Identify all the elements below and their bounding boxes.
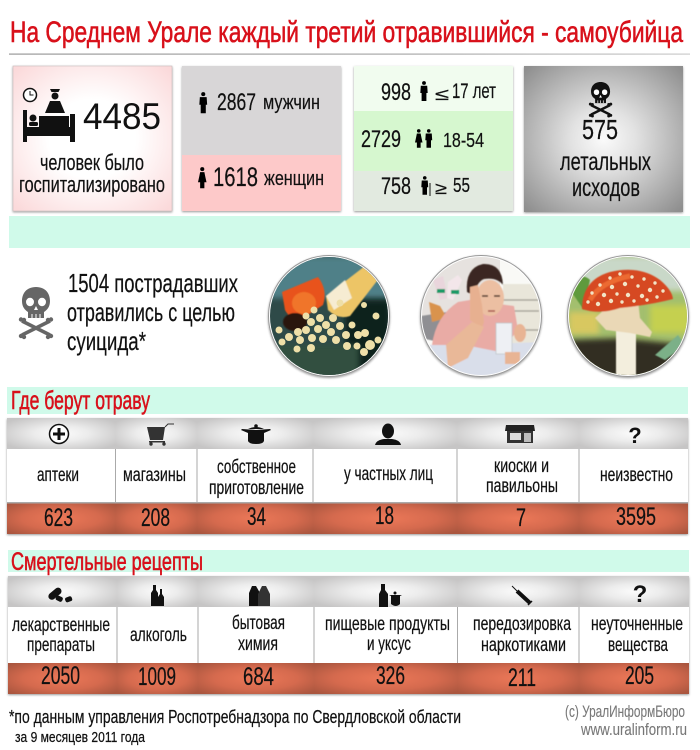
- number row: 208: [141, 504, 170, 532]
- labels row: передозировка: [473, 614, 571, 635]
- labels row: химия: [238, 634, 278, 655]
- caption: hospitalized: госпитализировано: [19, 172, 165, 197]
- men count: 2867: [217, 89, 256, 116]
- age under 17: ≤: [435, 85, 449, 104]
- age 18-54: 2729: [361, 126, 401, 153]
- age under 17: [381, 79, 496, 106]
- icon row: [7, 418, 688, 449]
- age over 55: 758: [381, 173, 411, 200]
- number row: 211: [508, 664, 536, 692]
- labels row: и уксус: [367, 634, 411, 655]
- caption: deaths: летальных: [560, 148, 651, 176]
- number row: 205: [625, 662, 654, 690]
- women count: [198, 162, 324, 192]
- icon row: [8, 576, 689, 608]
- icon: shopping cart: [147, 424, 174, 446]
- icon: gray skull: [19, 287, 53, 339]
- age over 55: ≥: [435, 179, 447, 198]
- icon: pills: [47, 586, 73, 603]
- table: substances: [8, 576, 689, 694]
- panel: deaths: [524, 66, 683, 212]
- labels row: наркотиками: [481, 635, 566, 656]
- labels row: алкоголь: [130, 625, 187, 646]
- text: 1504 suicide attempts: суицида*: [67, 326, 146, 356]
- labels row: неизвестно: [600, 465, 673, 486]
- icon: syringe: [512, 586, 532, 605]
- number row: 684: [243, 663, 274, 691]
- labels row: бытовая: [232, 613, 285, 634]
- labels row: собственное: [217, 457, 296, 478]
- number row: 2050: [41, 662, 80, 690]
- labels row: лекарственные: [12, 615, 110, 636]
- labels row: магазины: [123, 465, 186, 486]
- age under 17: 998: [381, 79, 411, 106]
- icon: bottle and pot: [379, 584, 402, 607]
- table: sources: [7, 418, 688, 534]
- labels row: препараты: [27, 635, 95, 656]
- caption: hospitalized: человек было: [40, 150, 144, 175]
- icon: cooking pot: [241, 424, 271, 444]
- number row: [7, 502, 688, 534]
- labels row: [12, 613, 683, 656]
- text: 1504 suicide attempts: [67, 268, 238, 356]
- panel: gender split: [182, 66, 341, 211]
- icon: question mark: ?: [633, 581, 647, 608]
- age over 55: [381, 173, 470, 200]
- panel: age split: [354, 66, 513, 211]
- caption: deaths: [560, 148, 651, 202]
- age 18-54: 18-54: [443, 130, 484, 152]
- number row: 34: [247, 503, 266, 531]
- age under 17: 17 лет: [452, 80, 496, 103]
- number row: 7: [516, 504, 526, 532]
- labels row: павильоны: [486, 476, 558, 497]
- labels row: аптеки: [37, 465, 79, 486]
- section heading: where poison is obtained: [7, 385, 688, 415]
- icon: hospital bed with nurse: [23, 88, 75, 142]
- footnote: *по данным управления Роспотребнадзора по Свердловской области: [9, 707, 461, 727]
- photo: woman with headache: [420, 256, 542, 380]
- icon: pharmacy cross: [50, 424, 68, 444]
- age over 55: 55: [453, 175, 470, 197]
- icon: household chemical bottles: [249, 586, 270, 606]
- labels row: [37, 456, 673, 499]
- icon: person bust: [375, 424, 401, 445]
- number row: 326: [376, 662, 405, 690]
- number row: 3595: [616, 503, 656, 531]
- caption: hospitalized: [19, 150, 165, 197]
- footnote: [9, 707, 461, 746]
- labels row: киоски и: [494, 456, 549, 477]
- photo: fly agaric mushroom: [568, 256, 690, 380]
- labels row: вещества: [608, 635, 668, 656]
- icon: question mark: ?: [628, 423, 642, 448]
- women count: 1618: [213, 162, 258, 192]
- section heading: deadly recipes: [8, 548, 689, 576]
- panel: hospitalized: [13, 66, 172, 211]
- labels row: приготовление: [209, 478, 304, 499]
- men count: мужчин: [263, 92, 320, 114]
- footnote: за 9 месяцев 2011 года: [15, 730, 146, 746]
- number row: [8, 662, 689, 694]
- age 18-54: [361, 126, 484, 153]
- labels row: пищевые продукты: [325, 614, 450, 635]
- caption: deaths: исходов: [572, 174, 640, 202]
- photo: pills: [268, 256, 390, 380]
- stat: 4485: 4485: [83, 96, 161, 137]
- women count: женщин: [264, 168, 324, 190]
- section heading: deadly recipes: Смертельные рецепты: [11, 548, 203, 576]
- section heading: where poison is obtained: Где берут отраву: [11, 385, 150, 415]
- number row: 1009: [138, 663, 176, 691]
- labels row: у частных лиц: [344, 464, 433, 485]
- number row: 623: [44, 504, 73, 532]
- men count: [199, 89, 320, 116]
- icon: bottles: [151, 585, 164, 606]
- icon: skull: [589, 82, 612, 117]
- number row: 18: [375, 502, 394, 530]
- text: 1504 suicide attempts: 1504 пострадавших: [68, 268, 238, 298]
- credit: [565, 702, 687, 739]
- stat: 575: 575: [582, 114, 618, 145]
- icon: kiosk: [505, 425, 535, 443]
- text: 1504 suicide attempts: отравились с целью: [67, 297, 235, 327]
